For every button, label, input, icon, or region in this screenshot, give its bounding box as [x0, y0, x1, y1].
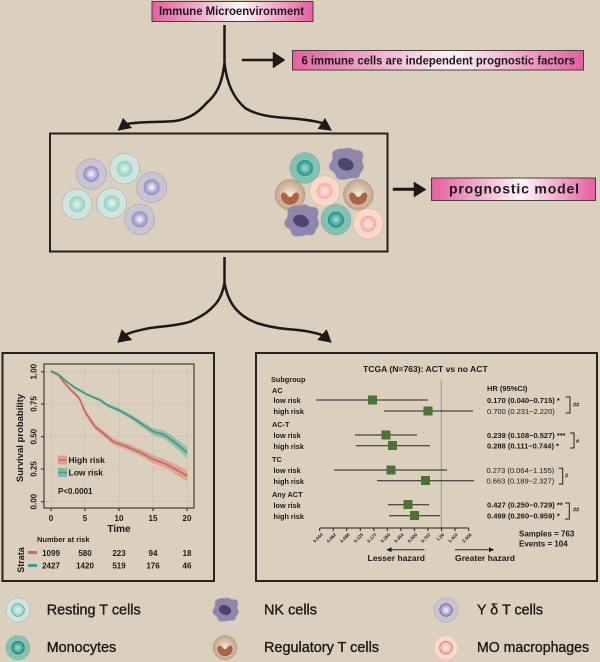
y axis ticks and labels: 0.00	[30, 493, 38, 509]
risk table: 223	[112, 549, 126, 558]
x axis ticks and labels	[49, 508, 192, 523]
subgroup labels: TC	[272, 455, 282, 464]
risk table: 176	[146, 562, 160, 570]
hazard axis: 1.00	[435, 532, 446, 542]
legend item: NK cells: NK cells	[264, 602, 317, 618]
legend: High risk	[68, 455, 105, 465]
sample summary: Events = 104	[519, 540, 568, 548]
risk table: Number at risk	[37, 535, 90, 544]
subgroup labels: low risk	[274, 466, 302, 475]
risk table: Strata	[16, 546, 26, 573]
subgroup labels: high risk	[274, 407, 305, 416]
risk table: 519	[112, 562, 126, 570]
panel: forest plot	[256, 353, 597, 581]
kaplan-meier chart	[15, 363, 194, 535]
legend item: M0 macrophages	[434, 635, 589, 660]
bracket marks: ##	[573, 508, 580, 514]
legend item: resting T cells	[6, 598, 141, 622]
sample summary	[519, 530, 575, 548]
subgroup labels: AC	[272, 386, 283, 395]
hazard axis	[312, 528, 473, 544]
y axis ticks and labels	[30, 363, 44, 509]
bracket marks: ##	[573, 402, 580, 408]
hazard axis: 1.410	[447, 532, 459, 544]
subgroup labels: Any ACT	[272, 490, 303, 499]
greater hazard arrow	[455, 550, 515, 563]
x axis ticks and labels: 20	[183, 514, 192, 523]
panel: cell groups	[50, 134, 388, 252]
lesser hazard arrow: Lesser hazard	[368, 554, 425, 563]
high risk cell cluster	[275, 148, 383, 239]
legend item: gamma delta T cells	[434, 598, 543, 622]
hazard axis: 0.177	[366, 532, 378, 544]
x axis ticks and labels: 0	[49, 514, 54, 523]
arrow to prognostic model	[393, 182, 426, 197]
legend item: monocytes	[6, 635, 116, 660]
callout: 6 immune cells	[292, 50, 584, 70]
hazard ratio table: 0.427 (0.250−0.729) **	[487, 500, 563, 510]
subgroup labels: high risk	[274, 477, 305, 486]
subgroup labels: high risk	[274, 442, 305, 451]
callout: prognostic model: prognostic model	[449, 180, 579, 196]
risk table: 1099	[42, 549, 60, 558]
subgroup labels: AC-T	[272, 420, 290, 429]
legend item: regulatory T cells	[213, 635, 379, 660]
subgroup labels: low risk	[274, 501, 302, 510]
greater hazard arrow: Greater hazard	[455, 554, 515, 563]
subgroup labels	[271, 375, 306, 521]
x axis ticks and labels: 5	[83, 514, 88, 523]
p value: P<0.0001	[58, 487, 93, 496]
risk table: 1420	[76, 562, 94, 570]
x axis ticks and labels: 15	[149, 514, 158, 523]
y axis title: Survival probability	[15, 393, 26, 482]
legend: cell types	[6, 598, 589, 660]
hazard ratio table: 0.239 (0.108−0.527) ***	[487, 431, 566, 440]
arrow: model splits to two result panels	[117, 257, 332, 343]
subgroup labels: Subgroup	[271, 375, 306, 384]
high risk band	[51, 371, 187, 482]
legend item: gamma delta T cells: Y δ T cells	[477, 602, 543, 618]
risk table: 18	[183, 549, 192, 558]
bracket marks: #	[576, 439, 580, 445]
subgroup labels: low risk	[274, 396, 302, 405]
risk table: 2427	[42, 562, 60, 570]
reference line	[440, 380, 442, 528]
risk table	[16, 535, 192, 573]
x axis ticks and labels: 10	[115, 514, 124, 523]
hazard ratio table: 0.663 (0.189−2.327)	[486, 476, 555, 486]
title box: Immune Microenvironment	[152, 2, 313, 22]
low risk line	[51, 371, 187, 453]
subgroup labels: low risk	[274, 431, 302, 440]
legend item: NK cells	[213, 598, 317, 622]
legend: Low risk	[68, 468, 103, 478]
hazard axis: 0.044	[312, 532, 324, 544]
hazard axis: 0.125	[353, 532, 365, 544]
hazard axis: 0.707	[420, 532, 432, 544]
y axis ticks and labels: 1.00	[30, 363, 38, 379]
y axis ticks and labels: 0.50	[30, 428, 38, 444]
hazard ratio table: HR (95%CI)	[487, 384, 528, 393]
hazard ratio table	[486, 384, 566, 520]
risk table: 94	[149, 549, 158, 558]
x axis title: Time	[107, 524, 131, 535]
legend item: resting T cells: Resting T cells	[47, 602, 141, 618]
y axis ticks and labels: 0.75	[30, 396, 38, 412]
title box: Immune Microenvironment: Immune Microenvironment	[159, 4, 304, 18]
sample summary: Samples = 763	[519, 530, 575, 538]
hazard axis: 0.500	[407, 532, 419, 544]
low risk cell cluster	[62, 153, 167, 235]
subgroup labels: high risk	[274, 512, 305, 521]
hazard ratio table: 0.273 (0.064−1.155)	[486, 466, 555, 475]
legend	[58, 455, 105, 478]
risk table: 580	[78, 549, 92, 558]
hazard ratio table: 0.700 (0.231−2.220)	[487, 407, 555, 416]
hazard axis: 0.062	[326, 532, 338, 544]
legend item: M0 macrophages: MO macrophages	[477, 640, 589, 656]
hazard ratio table: 0.499 (0.260−0.959) *	[487, 512, 560, 520]
bracket marks: #	[565, 474, 569, 480]
callout: 6 immune cells: 6 immune cells are independent prognostic factors	[302, 54, 575, 68]
significance brackets	[559, 397, 574, 519]
arrow to independent factors	[242, 52, 285, 68]
hazard axis: 0.250	[380, 532, 392, 544]
hazard ratio table: 0.288 (0.111−0.744) *	[487, 442, 559, 450]
legend item: regulatory T cells: Regulatory T cells	[264, 640, 379, 656]
hazard axis: 2.000	[461, 532, 473, 544]
panel: survival curve	[2, 353, 214, 581]
legend item: monocytes: Monocytes	[47, 640, 116, 656]
forest plot title: TCGA (N=763): ACT vs no ACT	[363, 364, 488, 374]
arrow: immune microenvironment splits to two cell groups	[118, 25, 332, 131]
callout: prognostic model	[432, 178, 596, 200]
hazard axis: 0.354	[393, 532, 405, 544]
lesser hazard arrow	[368, 550, 425, 563]
y axis ticks and labels: 0.25	[30, 461, 38, 477]
hazard ratio table: 0.170 (0.040−0.715) *	[487, 396, 560, 405]
bracket marks	[565, 402, 580, 514]
hazard axis: 0.088	[339, 532, 351, 544]
hazard ratio intervals	[316, 396, 474, 520]
low risk band	[51, 370, 187, 458]
risk table: 46	[183, 562, 192, 570]
high risk line	[51, 372, 187, 476]
